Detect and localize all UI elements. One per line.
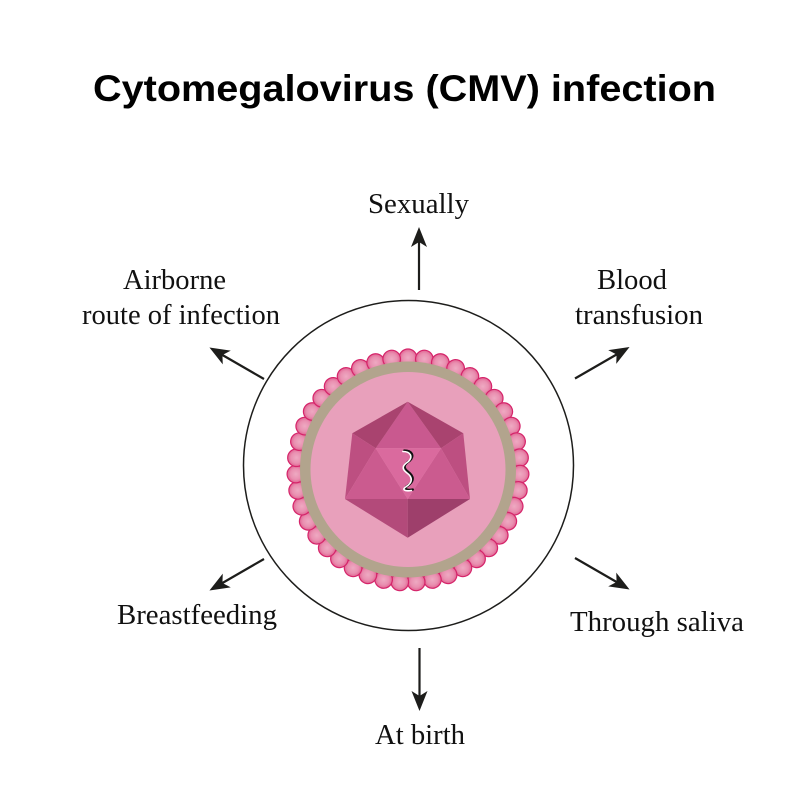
tegument	[310, 372, 506, 567]
label: breastfeeding: Breastfeeding	[117, 599, 277, 631]
glycoprotein beads	[287, 349, 529, 591]
label: airborne route of infection: route of infection	[82, 299, 280, 331]
label: at birth: At birth	[375, 719, 466, 751]
label: sexually: Sexually	[368, 188, 470, 220]
title: Cytomegalovirus (CMV) infection	[93, 68, 716, 109]
viral DNA strand	[403, 451, 413, 491]
label: airborne route of infection: Airborne	[123, 264, 226, 296]
label: through saliva: Through saliva	[570, 606, 744, 638]
arrow: upper left	[205, 341, 268, 386]
label: blood transfusion: Blood	[597, 264, 668, 296]
arrow: up	[411, 227, 427, 290]
envelope ring	[300, 362, 516, 578]
arrow: down	[412, 648, 428, 711]
label: blood transfusion	[575, 264, 703, 331]
outer circle	[244, 300, 574, 630]
icosahedral capsid	[345, 402, 470, 538]
arrow: upper right	[571, 340, 634, 385]
label: blood transfusion: transfusion	[575, 299, 703, 331]
virus diagram	[287, 349, 529, 591]
label: airborne route of infection	[82, 264, 280, 331]
arrow: lower right	[571, 551, 634, 596]
arrow: lower left	[205, 552, 268, 597]
